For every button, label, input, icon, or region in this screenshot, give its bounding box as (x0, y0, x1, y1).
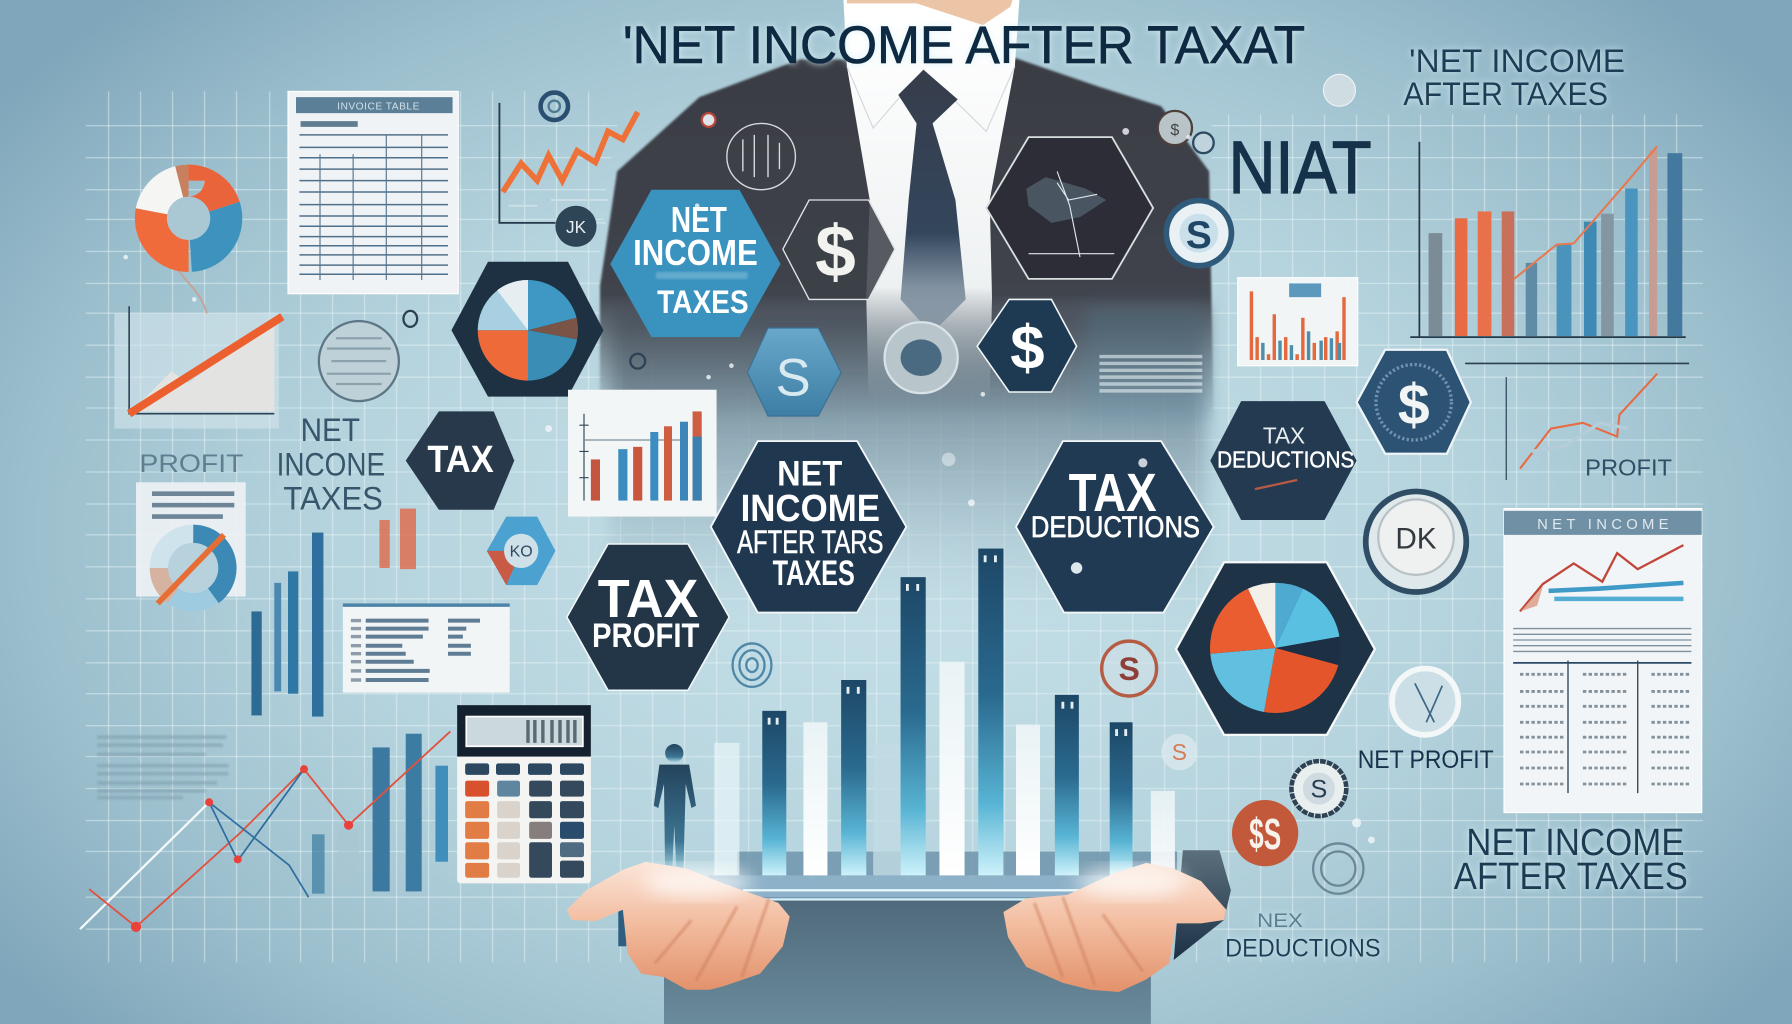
red pin on jacket (702, 113, 715, 127)
lower left line chart with bars (80, 731, 450, 932)
hexagon: net income taxes: INCOME (633, 232, 758, 273)
icon: gear s (1291, 761, 1346, 816)
ring icon (541, 93, 568, 120)
donut chart top left (151, 181, 226, 314)
invoice document top left (288, 91, 458, 294)
label: net incone taxes: INCONE (277, 446, 385, 482)
hexagon: tax profit: PROFIT (592, 617, 699, 655)
donut chart lower left (150, 525, 237, 611)
icon: orange dollar coin (1232, 800, 1298, 866)
hexagon: tax (406, 411, 514, 510)
suit jacket (600, 57, 1214, 423)
torso and sleeves (618, 850, 1231, 1024)
calculator (457, 705, 591, 883)
hexagon: dollar dark: $ (1010, 314, 1045, 383)
glowing platform (709, 875, 1189, 901)
icon: red ring dollar: S (1118, 651, 1140, 687)
centre bar chart (714, 549, 1177, 875)
small ring icons (403, 311, 645, 369)
hexagon: net income after tars taxes: INCOME (741, 487, 880, 529)
striped table panel (1099, 357, 1202, 391)
profit line chart right (1506, 374, 1657, 480)
dark badge near line chart: JK (566, 217, 587, 237)
vertical bars left (251, 533, 323, 717)
label: net income after taxes bottom right: AFTER TAXES (1454, 855, 1688, 897)
concentric ring icon (733, 643, 771, 687)
heading: net income after taxes top right (1403, 43, 1625, 112)
hexagon: net income after tars taxes (711, 441, 906, 613)
suit lower fade (611, 309, 1206, 617)
dark badge near line chart (555, 206, 597, 247)
label: net incone taxes: TAXES (283, 481, 383, 517)
heading: net income after taxes top right: AFTER TAXES (1403, 76, 1608, 112)
emblem on jacket (727, 123, 795, 190)
shirt (843, 0, 1019, 400)
hexagon: dollar outline: $ (815, 212, 856, 293)
hexagon: dollar blue (747, 328, 841, 416)
background grid (86, 91, 1703, 962)
icon: pale s ring (1161, 734, 1198, 770)
icon: dollar coin (1163, 198, 1234, 269)
hexagon: tax deductions small: DEDUCTIONS (1217, 446, 1354, 472)
person silhouette (654, 744, 696, 874)
area chart left (114, 306, 282, 429)
label: nex deductions (1225, 910, 1381, 963)
hexagon: big dark emblem (986, 137, 1153, 279)
small left document (136, 482, 246, 597)
document: net income report (1504, 509, 1702, 813)
label: nex deductions: DEDUCTIONS (1225, 935, 1381, 963)
gear ring centre (885, 322, 958, 393)
hexagon: tax profit: TAX (598, 569, 698, 629)
neck (847, 0, 1013, 25)
hexagon: tax deductions large: TAX (1069, 463, 1157, 523)
label: net incone taxes (277, 412, 385, 517)
hexagon: tax: TAX (427, 438, 494, 480)
icon: dial: DK (1395, 523, 1437, 556)
coins near shoulder (1158, 74, 1355, 153)
hexagon: net income taxes: NET (671, 199, 727, 240)
hexagon: tax deductions small: TAX (1263, 422, 1305, 448)
icon: pale s ring: S (1172, 739, 1187, 765)
label: profit left: PROFIT (139, 450, 243, 478)
label: nex deductions: NEX (1257, 910, 1303, 932)
label: net incone taxes: NET (301, 412, 360, 448)
hexagon: tax deductions large (1016, 441, 1214, 613)
scattered specks (123, 128, 1375, 843)
title: 'NET INCOME AFTER TAXAT (623, 16, 1305, 75)
icon: orange dollar coin: $S (1249, 811, 1281, 859)
hexagon: tax deductions small (1210, 401, 1357, 520)
collar (847, 66, 1015, 131)
label: net income after taxes bottom right: NET INCOME (1466, 821, 1685, 863)
hexagon: net income taxes: TAXES (657, 284, 749, 320)
heading: NIAT: NIAT (1229, 126, 1371, 209)
label: net profit: NET PROFIT (1358, 746, 1494, 774)
flag tile backing (1086, 306, 1206, 423)
hexagon: dollar blue: S (776, 348, 811, 407)
orange column pair (379, 509, 416, 569)
invoice document top left: INVOICE TABLE (337, 102, 420, 113)
hexagon: dollar outline (783, 200, 895, 299)
businessman upper body (600, 0, 1214, 617)
hexagon: tax deductions large: DEDUCTIONS (1031, 511, 1200, 544)
bar chart top right (1410, 142, 1689, 363)
small chart panel (1238, 278, 1358, 366)
icon: red ring dollar (1102, 641, 1157, 696)
icon: gear s: S (1310, 776, 1327, 804)
gem icon: KO (510, 544, 533, 561)
hexagon: dollar dark (977, 299, 1077, 392)
label: profit right: PROFIT (1585, 454, 1672, 480)
text document lower left (343, 603, 510, 693)
hexagon: tax profit (567, 544, 729, 690)
gem icon (487, 517, 555, 585)
orange slash on donut (158, 535, 224, 603)
coins near shoulder: $ (1170, 122, 1179, 139)
bar chart document (568, 390, 717, 517)
hexagon: net income after tars taxes: NET (777, 454, 843, 494)
lens circle (319, 321, 399, 401)
icon: dollar coin: S (1186, 214, 1212, 257)
icon: dial (1366, 491, 1466, 592)
hexagon: pie chart right (1176, 562, 1375, 735)
hexagon: net income after tars taxes: TAXES (773, 553, 855, 593)
document: net income report: NET INCOME (1537, 517, 1669, 533)
tie (898, 70, 966, 334)
left hand (567, 862, 790, 990)
icon: coin ring (1313, 843, 1363, 894)
line chart top centre (499, 103, 638, 223)
hexagon: pie chart left (451, 262, 603, 397)
hexagon: net income after tars taxes: AFTER TARS (737, 524, 883, 560)
hexagon: dollar ringed (1357, 350, 1471, 454)
heading: net income after taxes top right: 'NET INCOME (1409, 43, 1625, 79)
hexagon: net income taxes (610, 190, 781, 337)
icon: lens ring (1392, 669, 1458, 735)
right hand (1003, 863, 1226, 992)
label: net income after taxes bottom right (1454, 821, 1688, 897)
blurred text panel (97, 737, 229, 798)
hexagon: dollar ringed: $ (1398, 373, 1430, 437)
